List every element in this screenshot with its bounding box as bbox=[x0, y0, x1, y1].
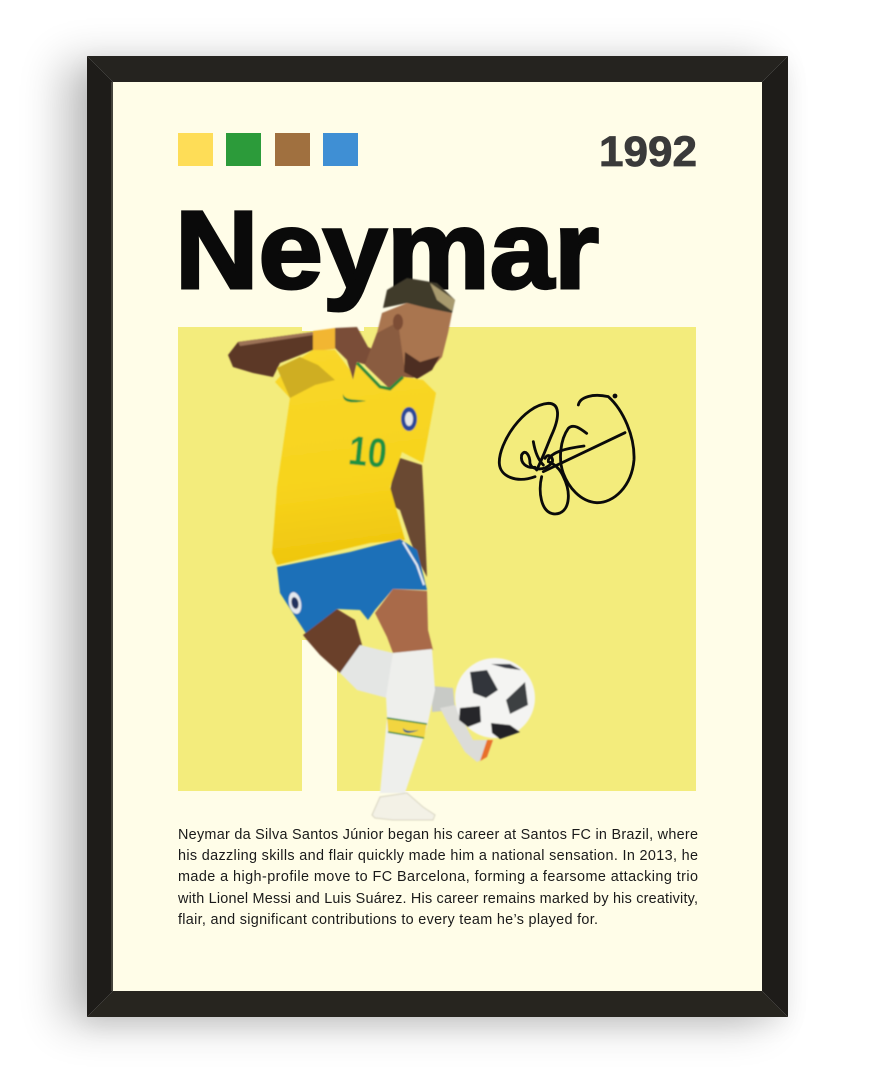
neck and head bbox=[365, 278, 455, 389]
biography text: flair, and significant contributions to every team he’s played for. bbox=[178, 912, 598, 928]
biography text: made a high-profile move to FC Barcelona, forming a fearsome attacking trio bbox=[178, 869, 698, 885]
birth year: 1992 bbox=[599, 128, 697, 176]
boot bbox=[372, 793, 435, 820]
nike swoosh bbox=[343, 394, 366, 402]
yellow jersey bbox=[272, 350, 436, 565]
biography text: with Lionel Messi and Luis Suárez. His career remains marked by his creativity, bbox=[177, 891, 698, 907]
front thigh bbox=[375, 589, 433, 653]
player figure bbox=[228, 278, 535, 820]
colour swatches bbox=[178, 133, 358, 166]
forearm with tattoos bbox=[388, 458, 427, 577]
sock band bbox=[387, 718, 427, 738]
yellow background panel bbox=[178, 327, 696, 791]
frame shadow bbox=[87, 56, 788, 1017]
back thigh bbox=[303, 609, 362, 673]
biography text: Neymar da Silva Santos Júnior began his career at Santos FC in Brazil, where bbox=[178, 827, 698, 843]
raised arm and hand bbox=[228, 327, 395, 380]
calf behind and foot bbox=[432, 686, 493, 762]
biography text bbox=[177, 827, 698, 928]
blue shorts bbox=[277, 539, 427, 635]
back sock bbox=[340, 645, 393, 698]
signature bbox=[499, 395, 634, 514]
title: Neymar bbox=[175, 189, 599, 312]
crest bbox=[401, 407, 417, 431]
black picture frame bbox=[87, 56, 788, 1017]
football bbox=[455, 658, 535, 739]
shirt number: 10 bbox=[346, 427, 389, 477]
cream poster paper bbox=[113, 82, 762, 991]
front sock bbox=[380, 649, 435, 793]
biography text: his dazzling skills and flair quickly made him a national sensation. In 2013, he bbox=[178, 848, 698, 864]
